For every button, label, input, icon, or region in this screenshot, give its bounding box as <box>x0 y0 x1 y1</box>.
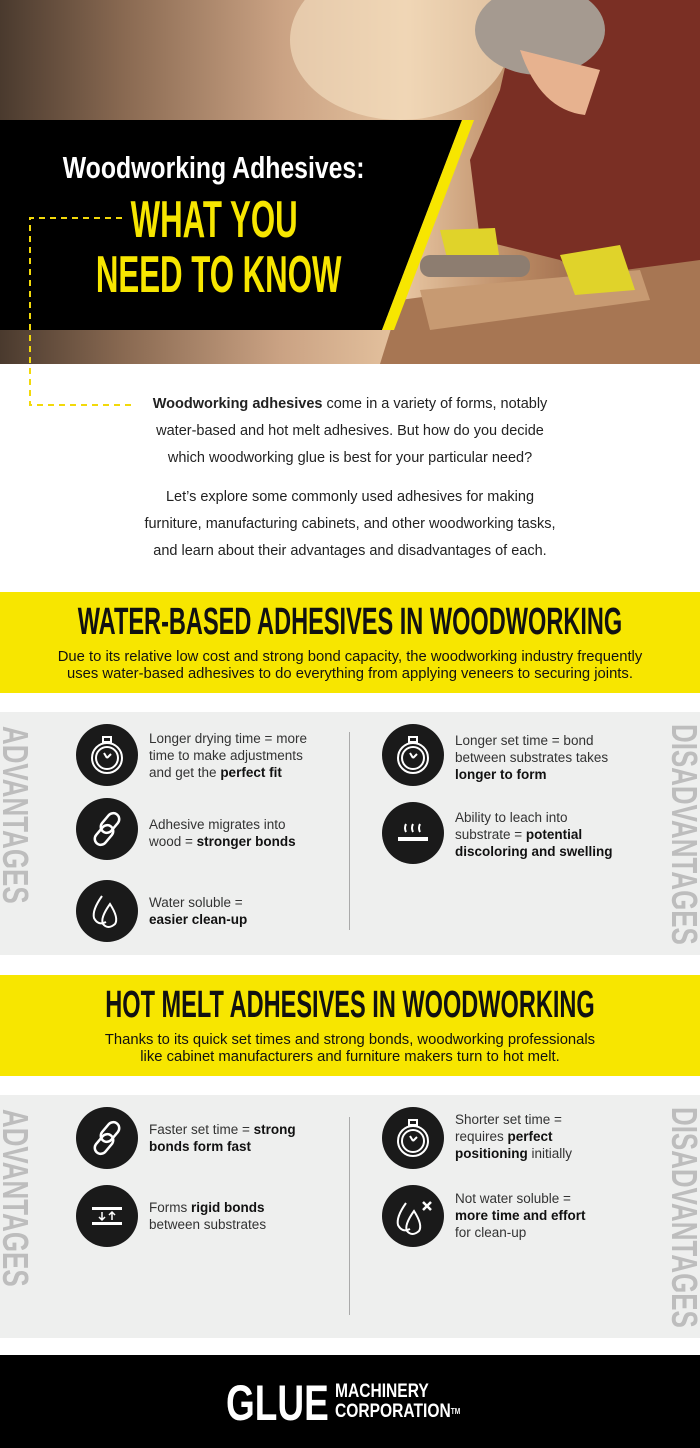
logo: CORPORATIONTM <box>335 1401 460 1422</box>
hero photo background <box>0 0 700 364</box>
text: leach: Ability to leach into <box>455 810 568 825</box>
panel: water-based pros/cons <box>0 712 700 955</box>
text: longer set time: between substrates takes <box>455 750 608 765</box>
band: water-based heading <box>0 592 700 693</box>
band: water-based heading: uses water-based adhesives to do everything from applying veneers to securing joints. <box>67 666 633 682</box>
band: hot melt heading <box>0 975 700 1076</box>
title line 3: NEED TO KNOW <box>96 246 341 304</box>
panel: hot melt pros/cons <box>0 1095 700 1338</box>
icon: stopwatch right <box>382 724 444 786</box>
text: shorter set: positioning initially <box>455 1146 572 1161</box>
intro text: furniture, manufacturing cabinets, and other woodworking tasks, <box>144 516 556 532</box>
worker figure <box>290 0 700 364</box>
intro text: Woodworking adhesives come in a variety of forms, notably <box>153 396 547 412</box>
text: leach: substrate = potential <box>455 827 582 842</box>
text: longer drying: time to make adjustments <box>149 748 303 763</box>
text: rigid bonds: Forms rigid bonds <box>149 1200 264 1215</box>
text: water soluble: Water soluble = <box>149 895 243 910</box>
text: longer set time: longer to form <box>455 767 546 782</box>
intro text: and learn about their advantages and disadvantages of each. <box>153 543 547 559</box>
logo: MACHINERY <box>335 1381 429 1402</box>
text: longer set time <box>455 733 608 782</box>
logo: GLUE <box>226 1375 329 1431</box>
text: faster set: bonds form fast <box>149 1139 251 1154</box>
icon: drops <box>76 880 138 942</box>
text: not water soluble <box>455 1191 586 1240</box>
band: water-based heading: WATER-BASED ADHESIVES IN WOODWORKING <box>78 601 622 643</box>
text: faster set <box>149 1122 296 1154</box>
title line 2: WHAT YOU <box>131 191 297 249</box>
icon: rigid bond <box>76 1185 138 1247</box>
icon: chain <box>76 798 138 860</box>
text: faster set: Faster set time = strong <box>149 1122 296 1137</box>
text: not water soluble: for clean-up <box>455 1225 526 1240</box>
intro text: which woodworking glue is best for your particular need? <box>168 450 532 466</box>
text: rigid bonds: between substrates <box>149 1217 266 1232</box>
intro text: Let’s explore some commonly used adhesives for making <box>166 489 534 505</box>
text: shorter set: Shorter set time = <box>455 1112 562 1127</box>
icon: drops with x <box>382 1185 444 1247</box>
text: leach <box>455 810 613 859</box>
band: hot melt heading: like cabinet manufacturers and furniture makers turn to hot melt. <box>140 1049 560 1065</box>
text: shorter set: requires perfect <box>455 1129 553 1144</box>
text: not water soluble: more time and effort <box>455 1208 586 1223</box>
text: migrates <box>149 817 296 849</box>
text: longer drying: and get the perfect fit <box>149 765 282 780</box>
text: longer drying <box>149 731 307 780</box>
icon: stopwatch <box>382 1107 444 1169</box>
band: hot melt heading: Thanks to its quick set times and strong bonds, woodworking professionals <box>105 1032 595 1048</box>
text: not water soluble: Not water soluble = <box>455 1191 571 1206</box>
intro text: water-based and hot melt adhesives. But how do you decide <box>156 423 544 439</box>
text: longer set time: Longer set time = bond <box>455 733 593 748</box>
text: water soluble <box>149 895 247 927</box>
band: hot melt heading: HOT MELT ADHESIVES IN WOODWORKING <box>105 984 595 1026</box>
dashed connector <box>29 217 131 406</box>
logo <box>226 1375 460 1431</box>
icon: chain <box>76 1107 138 1169</box>
title line 1: Woodworking Adhesives: <box>63 150 365 185</box>
title panel <box>0 120 474 330</box>
text: migrates: Adhesive migrates into <box>149 817 286 832</box>
band: water-based heading: Due to its relative low cost and strong bond capacity, the woodworking industry frequently <box>58 649 642 665</box>
text: shorter set <box>455 1112 572 1161</box>
text: migrates: wood = stronger bonds <box>149 834 296 849</box>
footer <box>0 1355 700 1448</box>
text: water soluble: easier clean-up <box>149 912 247 927</box>
text: leach: discoloring and swelling <box>455 844 613 859</box>
icon: heat <box>382 802 444 864</box>
text: rigid bonds <box>149 1200 266 1232</box>
icon: stopwatch <box>76 724 138 786</box>
intro text <box>144 396 556 559</box>
text: longer drying: Longer drying time = more <box>149 731 307 746</box>
